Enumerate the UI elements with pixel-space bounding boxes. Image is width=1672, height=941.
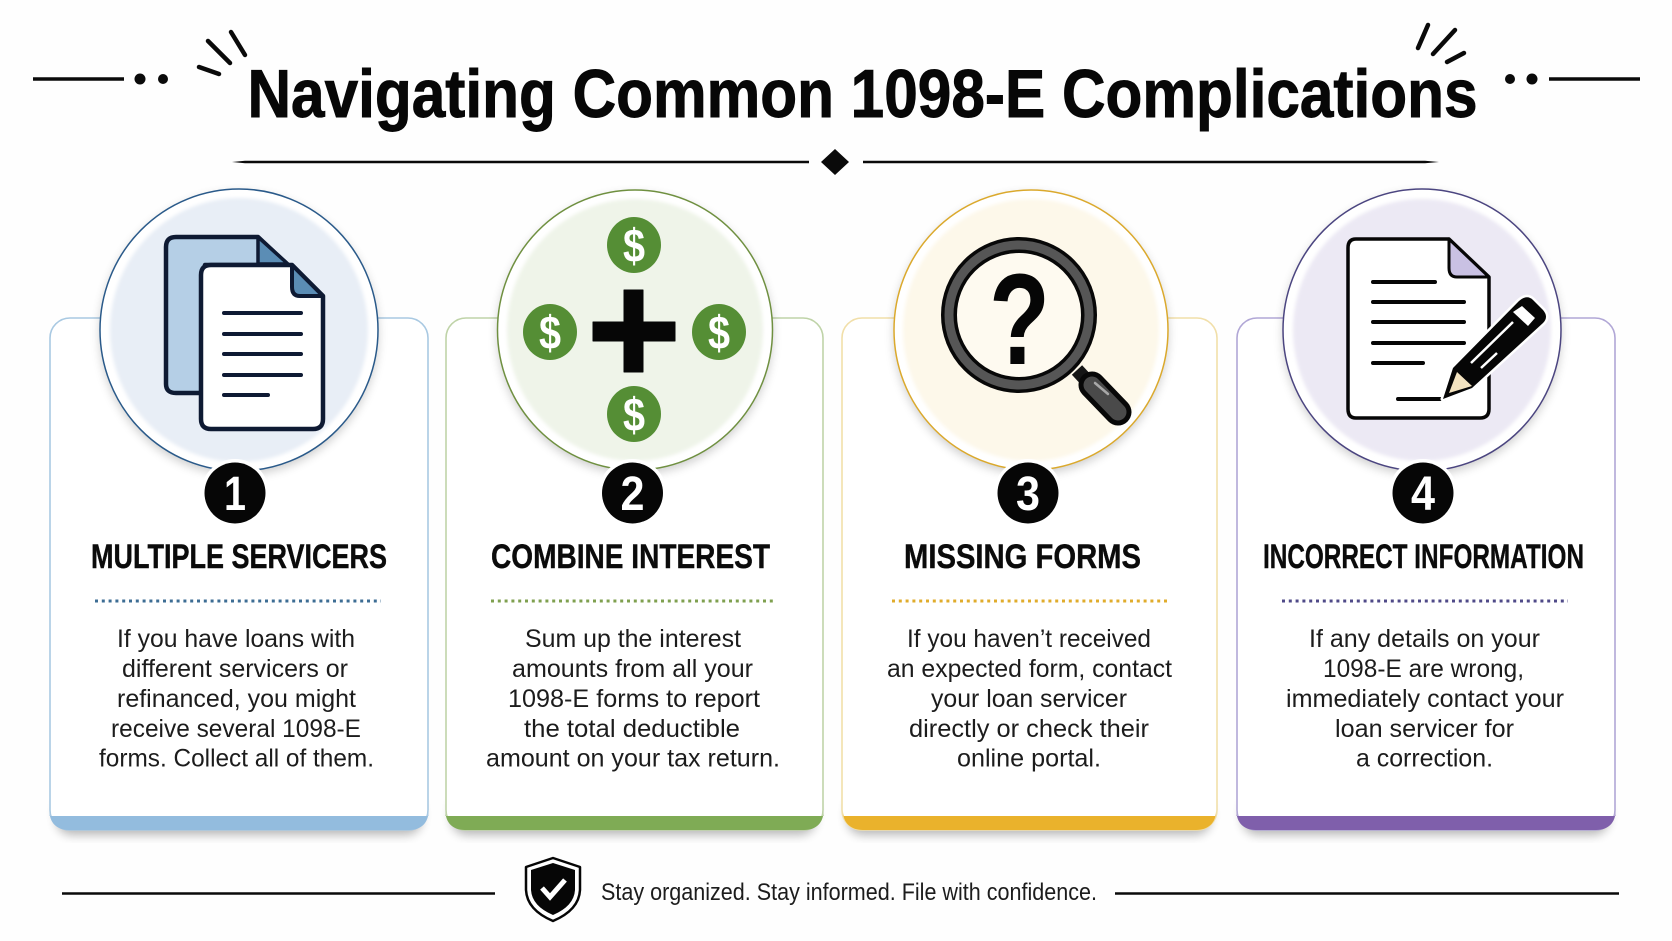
card 4 frame — [1236, 318, 1616, 835]
text block 3: online portal. — [957, 744, 1101, 772]
text block 1 — [99, 625, 374, 772]
panel: missing forms — [842, 190, 1217, 835]
badge 1: 1 — [224, 468, 246, 521]
card 1 frame — [50, 318, 428, 835]
heading 2: COMBINE INTEREST — [491, 538, 770, 576]
circle 3 — [894, 190, 1168, 474]
dotted rule 2 — [491, 600, 776, 602]
footer tagline: Stay organized. Stay informed. File with confidence. — [601, 879, 1097, 906]
text block 3 — [887, 625, 1172, 772]
icon: magnifying glass with question mark — [949, 245, 1118, 412]
text block 2: amount on your tax return. — [486, 744, 780, 772]
badge 2 — [598, 459, 666, 527]
title: Navigating Common 1098-E Complications — [248, 56, 1478, 132]
title divider with diamond — [232, 149, 1439, 175]
panel: combine interest — [446, 190, 824, 835]
badge 3: 3 — [1016, 468, 1040, 521]
heading 3: MISSING FORMS — [904, 538, 1141, 576]
panel: multiple servicers — [50, 189, 428, 835]
badge 1 — [201, 459, 269, 527]
text block 1: forms. Collect all of them. — [99, 744, 374, 772]
circle 2 — [498, 190, 772, 474]
text block 1: refinanced, you might — [117, 685, 356, 713]
text block 3: an expected form, contact — [887, 655, 1172, 683]
header ornaments right — [1418, 25, 1640, 84]
icon: two documents — [166, 237, 323, 429]
icon: magnifying glass with question mark: ? — [989, 247, 1050, 392]
dotted rule 4 — [1282, 600, 1568, 602]
dotted rule 1 — [95, 600, 381, 602]
text block 4: 1098-E are wrong, — [1323, 655, 1524, 683]
dotted rule 3 — [892, 600, 1167, 602]
text block 1: receive several 1098-E — [111, 715, 361, 743]
footer — [62, 858, 1619, 921]
text block 2: the total deductible — [524, 715, 740, 743]
badge 3 — [994, 459, 1062, 527]
icon: shield with check — [526, 858, 580, 921]
text block 2: 1098-E forms to report — [508, 685, 760, 713]
text block 4: loan servicer for — [1335, 715, 1514, 743]
text block 3: directly or check their — [909, 715, 1149, 743]
text block 1: If you have loans with — [117, 625, 355, 653]
circle 4 — [1283, 189, 1561, 475]
text block 3: If you haven’t received — [907, 625, 1151, 653]
badge 4 — [1389, 459, 1457, 527]
icon: document with pencil — [1348, 239, 1546, 418]
text block 2: Sum up the interest — [525, 625, 741, 653]
icon: plus with dollar coins: $ — [539, 306, 561, 359]
card 2 frame — [446, 318, 824, 835]
text block 1: different servicers or — [122, 655, 348, 683]
icon: plus with dollar coins: $ — [708, 306, 730, 359]
panel: incorrect information — [1236, 189, 1616, 835]
circle 1 — [100, 189, 378, 475]
text block 3: your loan servicer — [931, 685, 1127, 713]
heading 1: MULTIPLE SERVICERS — [91, 538, 387, 576]
badge 4: 4 — [1411, 468, 1435, 521]
icon: plus with dollar coins: $ — [623, 388, 645, 441]
text block 4: immediately contact your — [1286, 685, 1564, 713]
card 3 frame — [842, 318, 1217, 835]
header ornaments left — [33, 32, 245, 84]
text block 4: If any details on your — [1309, 625, 1540, 653]
text block 4: a correction. — [1356, 744, 1493, 772]
badge 2: 2 — [620, 468, 644, 521]
icon: plus with dollar coins: $ — [623, 219, 645, 272]
text block 4 — [1286, 625, 1564, 772]
icon: plus with dollar coins — [523, 217, 746, 442]
text block 2: amounts from all your — [512, 655, 753, 683]
text block 2 — [486, 625, 780, 772]
